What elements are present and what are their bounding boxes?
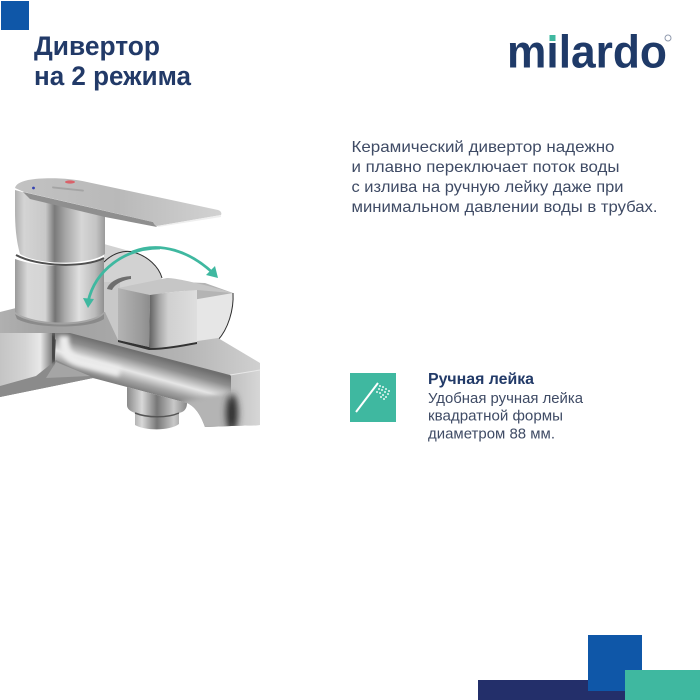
description text [352,139,658,216]
faucet: left arm [0,333,56,388]
faucet: spout edge [230,370,260,375]
faucet: wall behind block [104,282,120,342]
description text: и плавно переключает поток воды [352,159,620,176]
faucet: spout shadow [226,394,238,432]
faucet: right escutcheon [190,293,233,345]
faucet: lever indicators [32,187,35,189]
hand shower text [428,371,584,442]
corner blocks: bottom right [478,635,700,700]
corner square: top left [1,1,29,30]
hand shower text: Ручная лейка [428,371,534,388]
hand shower text: Удобная ручная лейка [428,391,584,407]
hand shower text: диаметром 88 мм. [428,426,555,442]
description text: с излива на ручную лейку даже при [352,179,624,196]
title: Дивертор [34,31,160,61]
faucet illustration [0,178,262,432]
arrow: to spout [132,248,214,274]
faucet: body and spout [0,330,262,432]
logo: milardo: milardo [507,26,667,78]
faucet: upper cylinder [15,190,105,263]
title: на 2 режима [34,61,192,91]
rotation arrows [83,248,218,308]
faucet: deck top [0,308,260,375]
faucet: rear wall plate [104,244,162,340]
arrow: to shower [88,248,160,302]
description text: Керамический дивертор надежно [352,139,615,156]
faucet: lever underside [23,192,157,227]
faucet: joint highlight [64,336,120,372]
faucet: rear connector [107,276,131,290]
faucet: diverter block [118,278,232,295]
hand shower text: квадратной формы [428,408,563,424]
faucet: lower cylinder [15,258,104,322]
faucet: joint shadow [53,333,54,362]
title [34,31,192,91]
icon: hand shower [350,373,396,422]
faucet: lever top [15,178,221,226]
faucet: lower nozzle [127,387,187,429]
description text: минимальном давлении воды в трубах. [352,199,658,216]
